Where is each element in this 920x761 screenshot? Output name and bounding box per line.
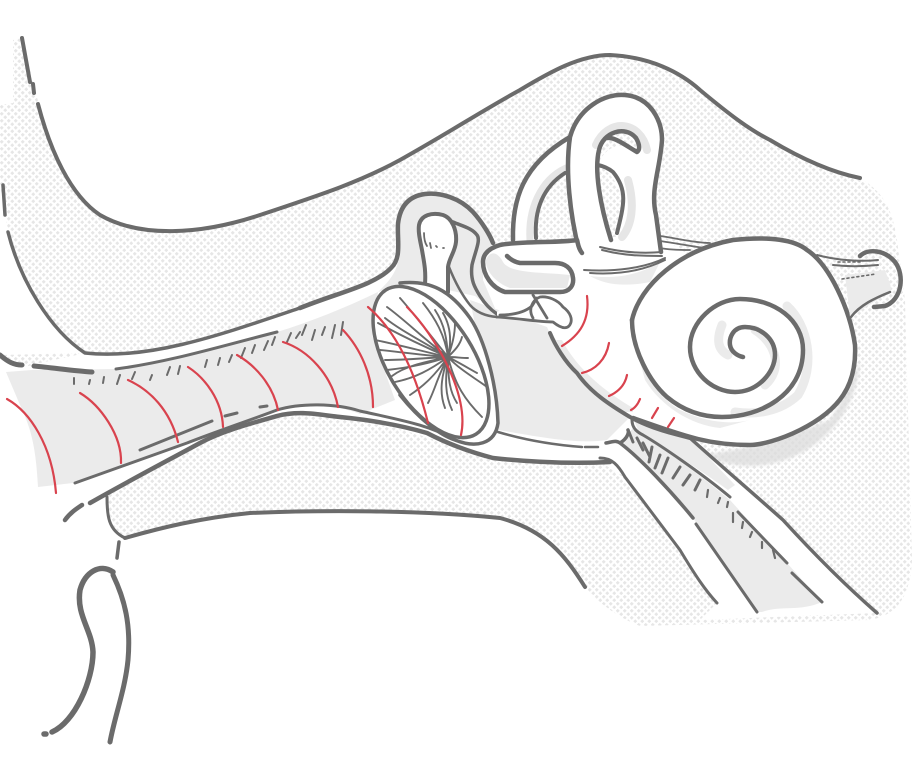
earlobe curve: [44, 568, 113, 734]
left skin line: [3, 185, 300, 354]
canal top line: [116, 332, 277, 369]
vestibule shadow: [590, 262, 660, 285]
red vessels on eardrum: [368, 307, 462, 435]
white eustachian tube band: [605, 438, 877, 620]
nerve hatch ticks: [838, 262, 876, 279]
skin dash lower: [117, 542, 119, 558]
canal lower inner line: [75, 405, 455, 483]
ossicles and tympanic bump: [300, 194, 592, 328]
white ear passage and middle ear base: [0, 195, 670, 503]
ear canal grey fill: [6, 292, 395, 487]
tube hatch ticks: [629, 432, 700, 490]
cochlea left shading: [634, 340, 750, 428]
auditory nerve: [660, 236, 901, 317]
incus inner edge: [449, 267, 497, 317]
incus body shadow: [486, 253, 570, 288]
earlobe back curve: [110, 575, 129, 742]
eustachian tube lines: [600, 420, 877, 613]
superior canal tube: [568, 95, 662, 255]
anterior canal inner line: [536, 173, 565, 238]
canal hairs: [74, 322, 343, 384]
eardrum membrane: [349, 267, 513, 457]
vestibule lower shadow: [556, 340, 640, 412]
incus body: [481, 239, 592, 290]
canal vessels 2 to 7: [80, 330, 373, 463]
red vessels on cochlea base: [562, 296, 674, 427]
vestibule white fill: [545, 235, 700, 430]
anterior canal hole: [535, 173, 575, 240]
malleus ticks: [424, 233, 444, 248]
ear canal upper dashes: [0, 355, 22, 365]
stippled tissue background: [0, 38, 912, 626]
eustachian grey wedge: [634, 420, 735, 490]
cochlea spiral: [632, 299, 803, 417]
cochlea inner shading: [719, 306, 808, 413]
malleus: [419, 214, 456, 292]
anterior canal tube: [513, 137, 575, 242]
tube junction and ticks lower line: [606, 430, 693, 518]
vestibule lower line: [550, 333, 690, 438]
canal lower streaks: [140, 406, 267, 450]
tube upper ticks line: [632, 420, 787, 563]
incus long process: [453, 222, 497, 314]
vestibule cross lines: [584, 247, 665, 273]
middle ear cavity grey fill: [470, 300, 630, 441]
incus body outline: [483, 240, 582, 292]
bump grey band: [378, 195, 497, 313]
nerve lines above cochlea: [660, 236, 710, 250]
tube small ticks: [707, 490, 775, 558]
stapes white body: [497, 293, 569, 327]
head outer skin line: [22, 38, 860, 231]
cochlea drop shadow: [705, 360, 860, 466]
tragus and jaw outline: [107, 497, 125, 538]
superior canal shadow: [596, 126, 647, 237]
cochlea body fill and outline: [632, 238, 855, 445]
tympanic bump outer line: [300, 194, 493, 308]
semicircular canals: [513, 95, 662, 255]
eardrum: [349, 267, 513, 457]
superior canal outer line: [568, 95, 662, 252]
skin dash: [65, 505, 82, 520]
anterior canal shadow: [530, 168, 566, 240]
lower stipple boundary: [125, 511, 585, 587]
tube lower dash: [792, 573, 822, 602]
tube right outer line: [690, 438, 877, 613]
nerve grey fill: [845, 270, 891, 317]
red vessel in outer canal: [7, 399, 56, 493]
posterior loop line: [598, 165, 623, 233]
superior canal hole: [597, 132, 640, 237]
tube left outer line: [600, 458, 717, 603]
canal thick lower line: [90, 413, 610, 503]
superior canal inner line: [597, 131, 639, 240]
nerve root right lines: [817, 255, 878, 266]
cochlea: [632, 238, 855, 445]
stapes lines: [497, 295, 571, 328]
middle ear lower line: [498, 432, 598, 447]
canal top thick dash: [34, 366, 92, 372]
eustachian tube grey channel: [620, 428, 822, 612]
nerve end ring: [860, 251, 901, 307]
anterior canal outlines: [513, 137, 570, 240]
eardrum outer arc: [400, 282, 498, 444]
eardrum spokes: [375, 298, 487, 417]
nerve lower edge: [851, 292, 890, 317]
tube center line: [696, 524, 757, 612]
